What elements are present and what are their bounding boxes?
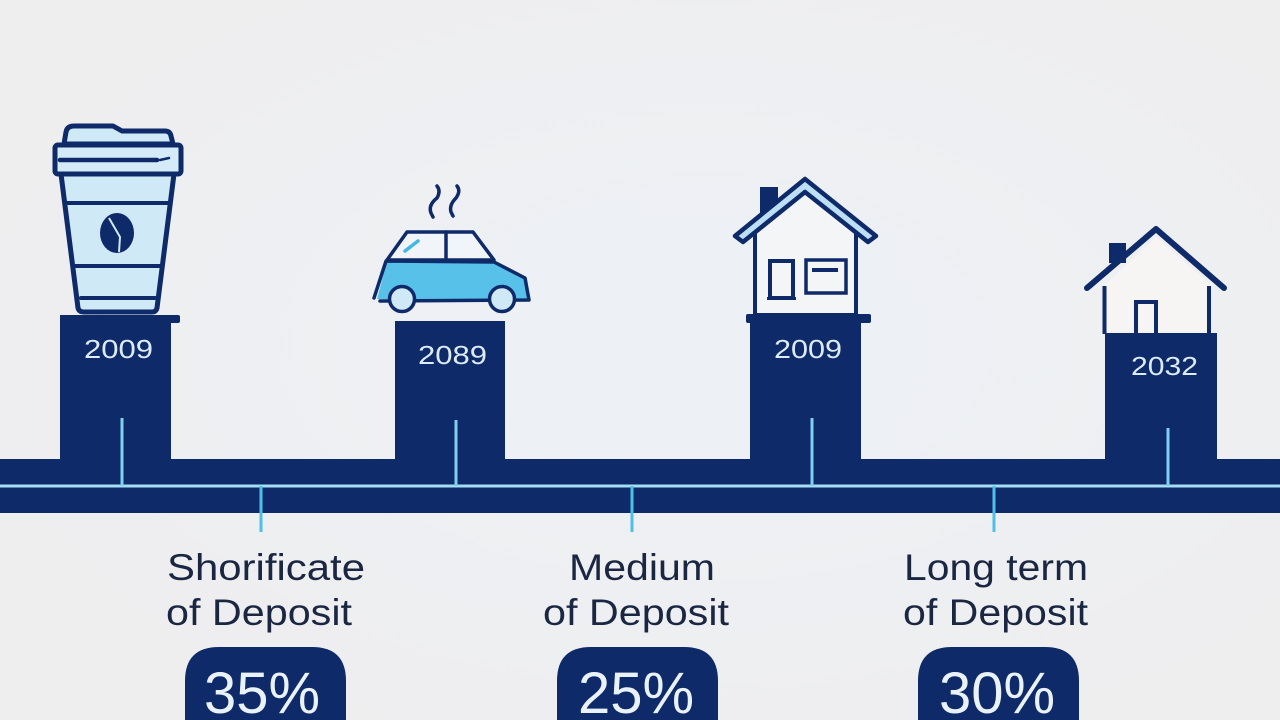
pillar: 2009 third: 2009: [774, 334, 842, 364]
pillar: 2032 fourth: 2032: [1131, 351, 1198, 381]
pillar: 2009 first: [60, 315, 180, 486]
pillar: 2089 second: [395, 321, 505, 486]
label: short term: of Deposit: [166, 592, 353, 633]
label: long term: Long term: [904, 547, 1088, 588]
label: medium: [543, 547, 730, 633]
icon: coffee cup: [55, 126, 181, 312]
pillar: 2032 fourth: [1105, 333, 1217, 486]
icon: large house: [735, 179, 876, 315]
pillar: 2089 second: 2089: [418, 340, 487, 370]
timeline bar: [0, 459, 1280, 513]
label: long term: [903, 547, 1089, 633]
label: medium: of Deposit: [543, 592, 730, 633]
label: long term: of Deposit: [903, 592, 1089, 633]
icon: coffee bean: [100, 213, 134, 253]
connector ticks: [260, 486, 996, 532]
pillar: 2009 first: 2009: [84, 334, 153, 364]
icon: car with steam: [374, 186, 529, 312]
badge: 35%: [185, 647, 346, 720]
icon: small house: [1087, 229, 1224, 334]
label: medium: Medium: [569, 547, 715, 588]
label: short term: [166, 547, 365, 633]
badge: 30%: [918, 647, 1079, 720]
badge: 25%: [557, 647, 718, 720]
label: short term: Shorificate: [167, 547, 365, 588]
pillar: 2009 third: [746, 314, 871, 486]
